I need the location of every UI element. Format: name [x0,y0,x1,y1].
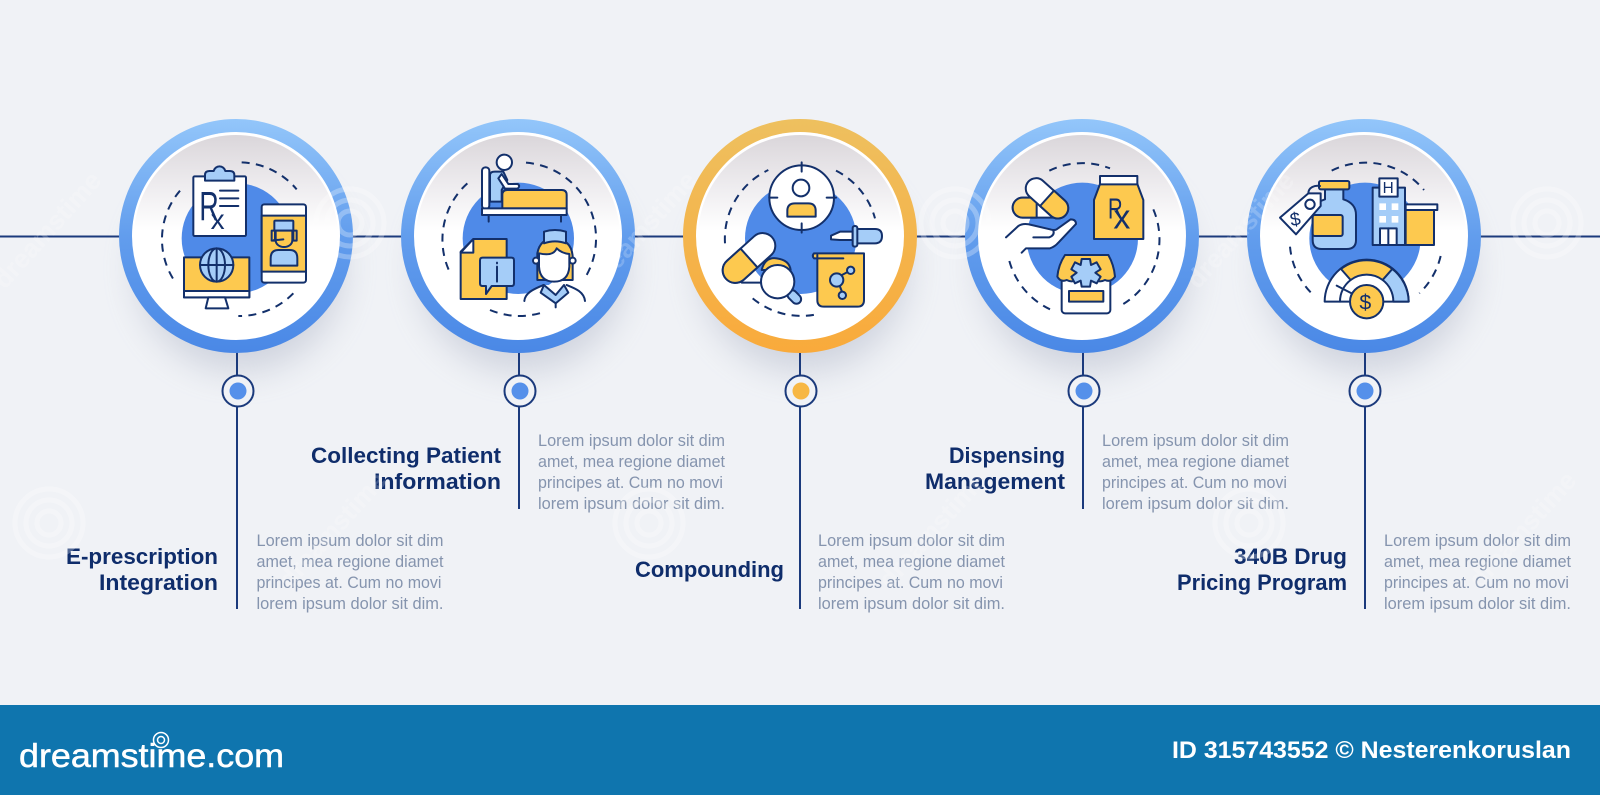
description: lorem ipsum dolor sit dim. [1102,495,1289,513]
ring [1247,119,1481,353]
heading [311,443,502,494]
heading: 340B Drug [1234,544,1347,569]
drop shadow [982,164,1190,372]
heading [925,443,1066,494]
drop shadow [1264,164,1472,372]
description: Lorem ipsum dolor sit dim [1102,432,1289,450]
step 2: collecting patient information [311,119,725,513]
description [1102,432,1289,513]
watermark overlay: dreamstime [582,165,702,294]
timeline dot [1350,376,1380,406]
watermark overlay: dreamstime [1462,465,1582,594]
footer credit: ID 315743552 © Nesterenkoruslan [1172,737,1571,764]
heading: Integration [99,570,218,595]
ring [119,119,353,353]
description: amet, mea regione diamet [256,553,444,571]
timeline dot [1068,376,1100,406]
heading [66,544,218,595]
description [538,432,725,513]
drop shadow [700,164,908,372]
description: Lorem ipsum dolor sit dim [818,532,1005,550]
drop shadow [136,164,344,372]
heading: Compounding [635,557,784,582]
drop shadow [418,164,626,372]
step 3: compounding [635,119,1005,613]
description: Lorem ipsum dolor sit dim [256,532,444,550]
footer bar [0,705,1600,795]
inner disc [1260,132,1468,340]
ring [683,119,917,353]
description: principes at. Cum no movi [1102,474,1287,492]
watermark overlay [0,165,1582,594]
description: amet, mea regione diamet [818,553,1005,571]
icon: target patient, capsule, dropper, beaker [717,162,882,316]
ring [401,119,635,353]
description [1384,532,1571,613]
heading [1177,544,1347,595]
description: principes at. Cum no movi [818,574,1003,592]
inner disc [696,132,904,340]
connector line [1364,350,1366,609]
timeline dot [504,376,536,406]
icon: prescription, globe and doctor phone: R [199,183,219,229]
icon: prescription, globe and doctor phone: x [211,204,225,235]
icon: patient in bed, file and nurse [442,155,596,316]
description: lorem ipsum dolor sit dim. [538,495,725,513]
icon: pills in hand, Rx bag, pharmacy: x [1113,198,1130,236]
footer logo: dreamstime.com [19,737,284,774]
description [818,532,1005,613]
description: principes at. Cum no movi [256,574,442,592]
heading: Pricing Program [1177,570,1347,595]
description: principes at. Cum no movi [538,474,723,492]
description: Lorem ipsum dolor sit dim [538,432,725,450]
horizontal timeline line [0,236,1600,238]
icon: priced bottle, hospital, price gauge: $ [1288,208,1303,230]
description: lorem ipsum dolor sit dim. [818,595,1005,613]
icon: priced bottle, hospital, price gauge: H [1383,180,1394,197]
watermark overlay: dreamstime [872,465,992,594]
heading: Collecting Patient [311,443,502,468]
watermark overlay: dreamstime [272,465,392,594]
icon: pills in hand, Rx bag, pharmacy: R [1108,193,1123,225]
connector line [799,350,801,609]
connector line [1082,350,1084,509]
icon: priced bottle, hospital, price gauge [1280,163,1441,318]
inner disc [132,132,340,340]
inner disc [978,132,1186,340]
description: amet, mea regione diamet [1102,453,1289,471]
description: amet, mea regione diamet [538,453,725,471]
icon: pills in hand, Rx bag, pharmacy [1006,163,1159,313]
step 5: 340B drug pricing program [1177,119,1571,613]
step 1: e-prescription integration [66,119,444,613]
ring [965,119,1199,353]
inner disc [414,132,622,340]
step 4: dispensing management [925,119,1289,513]
description: amet, mea regione diamet [1384,553,1571,571]
description [256,532,444,613]
heading: Dispensing [949,443,1065,468]
connector line [518,350,520,509]
watermark overlay: dreamstime [1180,165,1300,294]
description: Lorem ipsum dolor sit dim [1384,532,1571,550]
connector line [236,350,238,609]
description: principes at. Cum no movi [1384,574,1569,592]
description: lorem ipsum dolor sit dim. [1384,595,1571,613]
timeline dot [222,376,254,406]
timeline dot [786,376,816,406]
heading: Information [374,469,501,494]
heading: E-prescription [66,544,218,569]
icon: priced bottle, hospital, price gauge: $ [1359,290,1371,314]
description: lorem ipsum dolor sit dim. [256,595,444,613]
icon: prescription, globe and doctor phone [162,162,306,316]
heading: Management [925,469,1066,494]
